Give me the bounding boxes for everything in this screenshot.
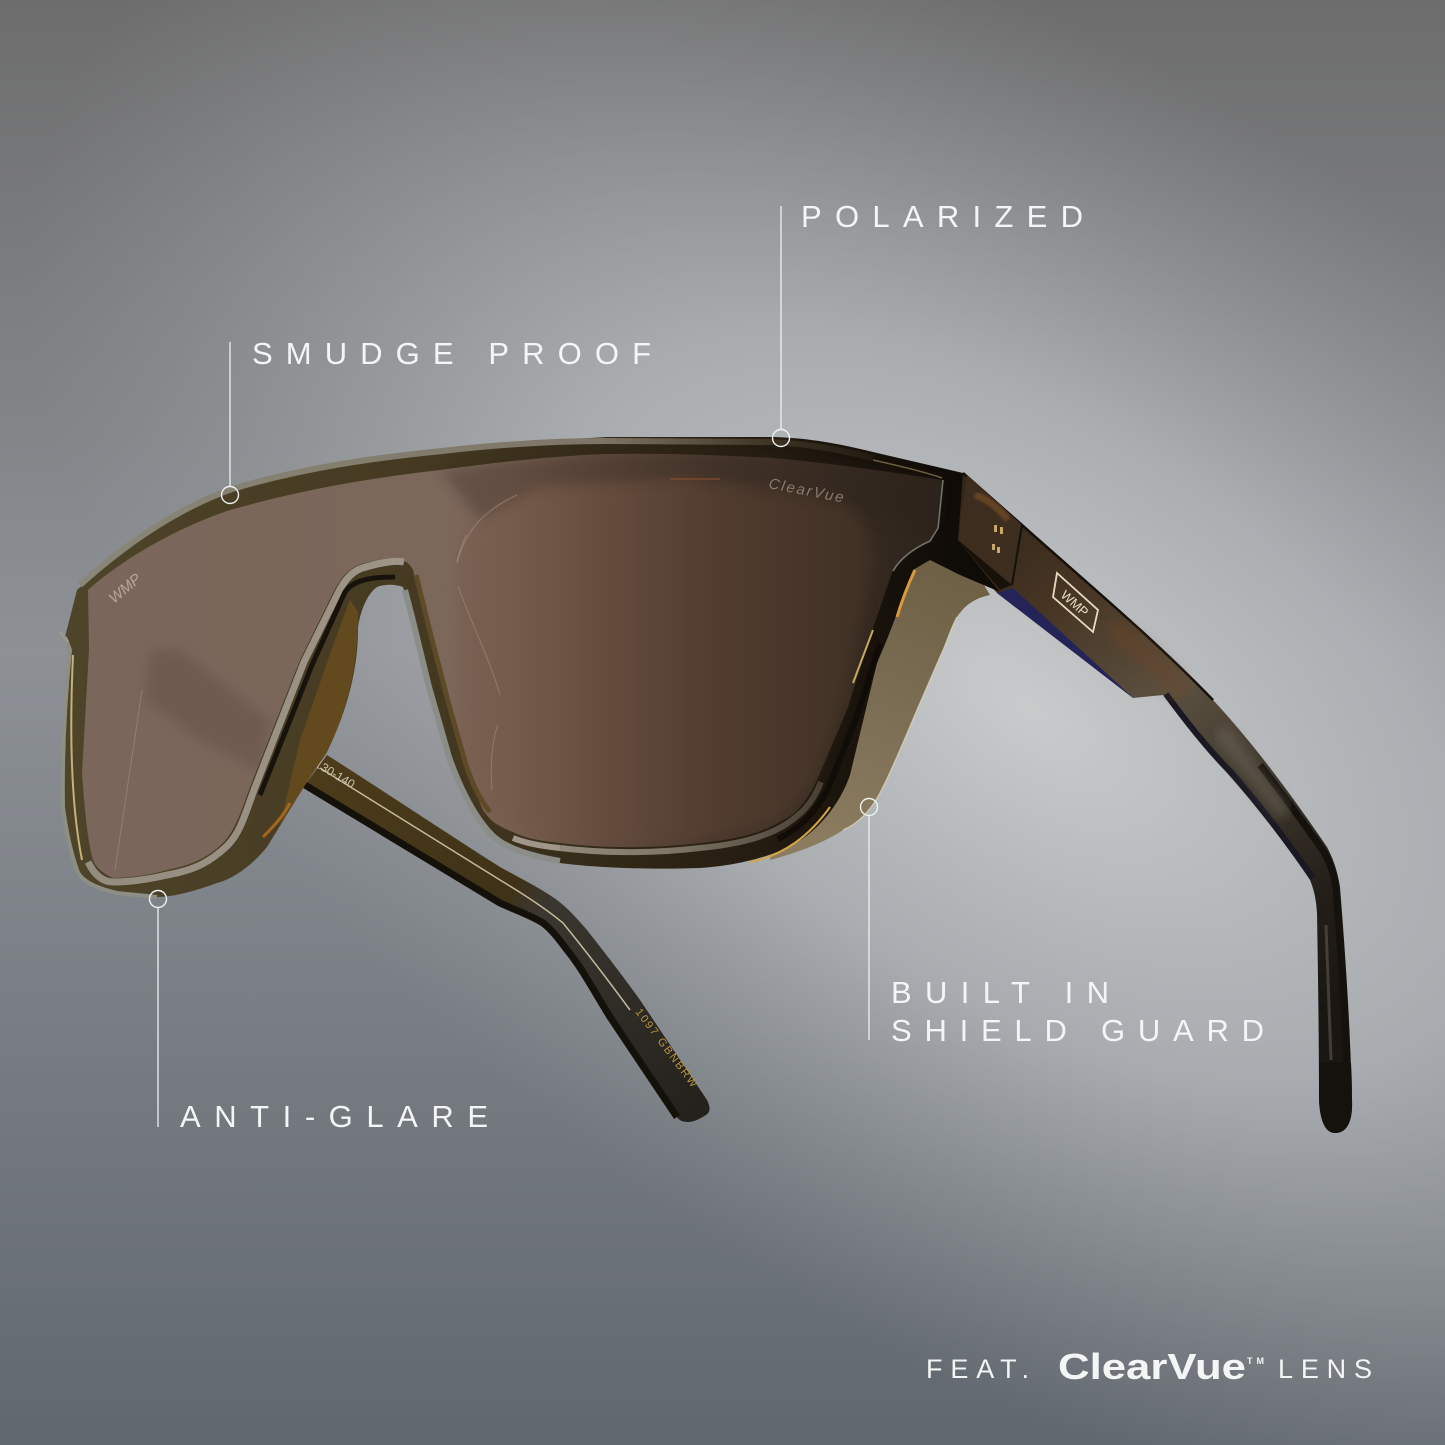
frame (60, 437, 1000, 897)
temple blue inner edge (997, 588, 1133, 698)
side shield guard (770, 545, 990, 860)
callout: smudge proof: SMUDGE PROOF (252, 336, 651, 371)
footer: feat. clearvue lens: ClearVue (1058, 1346, 1246, 1387)
callout: smudge proof (222, 336, 651, 504)
bridge right silver edge (405, 590, 560, 861)
reflection panel outline (457, 495, 517, 563)
callout: anti-glare (150, 890, 488, 1134)
lens (82, 454, 942, 878)
lens shadow band (145, 650, 270, 772)
hinge pins (992, 525, 1003, 553)
footer: feat. clearvue lens: FEAT. (926, 1354, 1029, 1384)
temple logo plate: WMP (1058, 587, 1091, 620)
lens mark: ClearVue: ClearVue (767, 475, 845, 506)
lens scratches (115, 535, 500, 870)
temple print: size: 130-140 (312, 757, 358, 791)
dark line beside left rim (260, 577, 395, 795)
callout: built in shield guard (860, 798, 1264, 1048)
lens reflection panel (457, 478, 873, 840)
temple logo plate (1053, 573, 1098, 632)
top rim highlight (80, 441, 873, 585)
silver outer rim, left (63, 637, 157, 897)
footer: feat. clearvue lens: LENS (1278, 1354, 1372, 1384)
temple hinge block (958, 475, 1022, 590)
callout: polarized: POLARIZED (801, 199, 1083, 234)
callout: anti-glare: ANTI-GLARE (180, 1099, 488, 1134)
far temple arm (950, 473, 1352, 1133)
gold rim highlights (897, 570, 915, 617)
temple print: model code: 1097 GBNBRW (633, 1007, 700, 1090)
footer: feat. clearvue lens: TM (1247, 1356, 1264, 1366)
callout: polarized (772, 199, 1083, 446)
amber side of frame near bridge (280, 600, 358, 825)
lens top shade (440, 454, 942, 527)
beige rim highlight (88, 561, 404, 882)
footer: feat. clearvue lens (926, 1346, 1372, 1387)
near temple arm (305, 755, 710, 1122)
callout: built in shield guard: BUILT IN (891, 975, 1109, 1010)
near lens mark: WMP: WMP (106, 570, 145, 607)
callout: built in shield guard: SHIELD GUARD (891, 1013, 1264, 1048)
temple tip (1319, 1063, 1352, 1133)
